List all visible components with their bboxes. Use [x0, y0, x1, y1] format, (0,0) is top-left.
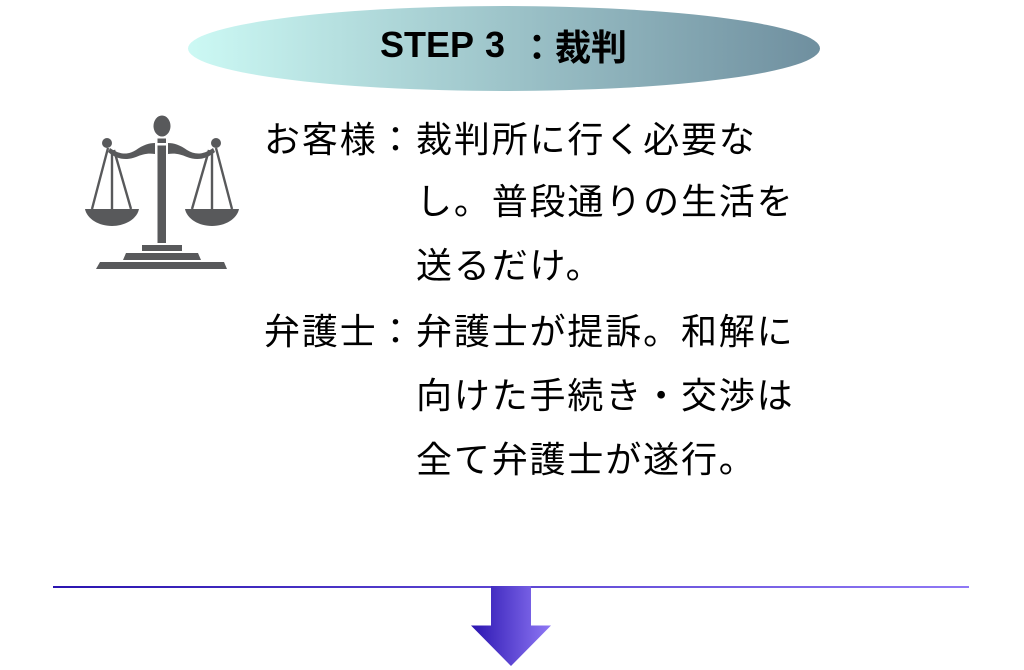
- title: 裁判: [555, 19, 627, 71]
- lawyer text: [416, 303, 795, 483]
- customer text: [416, 111, 795, 289]
- lawyer text: 向けた手続き・交渉は: [416, 367, 795, 419]
- icon: balance scale: [85, 116, 239, 269]
- lawyer text: 全て弁護士が遂行。: [416, 431, 757, 483]
- customer label: お客様：: [264, 111, 415, 163]
- lawyer label: 弁護士：: [264, 303, 415, 355]
- divider line: [53, 586, 969, 588]
- title: [380, 19, 627, 71]
- customer text: し。普段通りの生活を: [416, 173, 795, 225]
- title: STEP: [380, 24, 474, 65]
- customer text: 送るだけ。: [416, 237, 603, 289]
- lawyer text: 弁護士が提訴。和解に: [416, 303, 795, 355]
- header ellipse with title: [188, 6, 820, 91]
- title: 3: [485, 24, 505, 65]
- title: ：: [519, 19, 555, 71]
- arrow: [471, 586, 551, 666]
- text block: customer and lawyer: [264, 111, 795, 483]
- customer text: 裁判所に行く必要な: [416, 111, 757, 163]
